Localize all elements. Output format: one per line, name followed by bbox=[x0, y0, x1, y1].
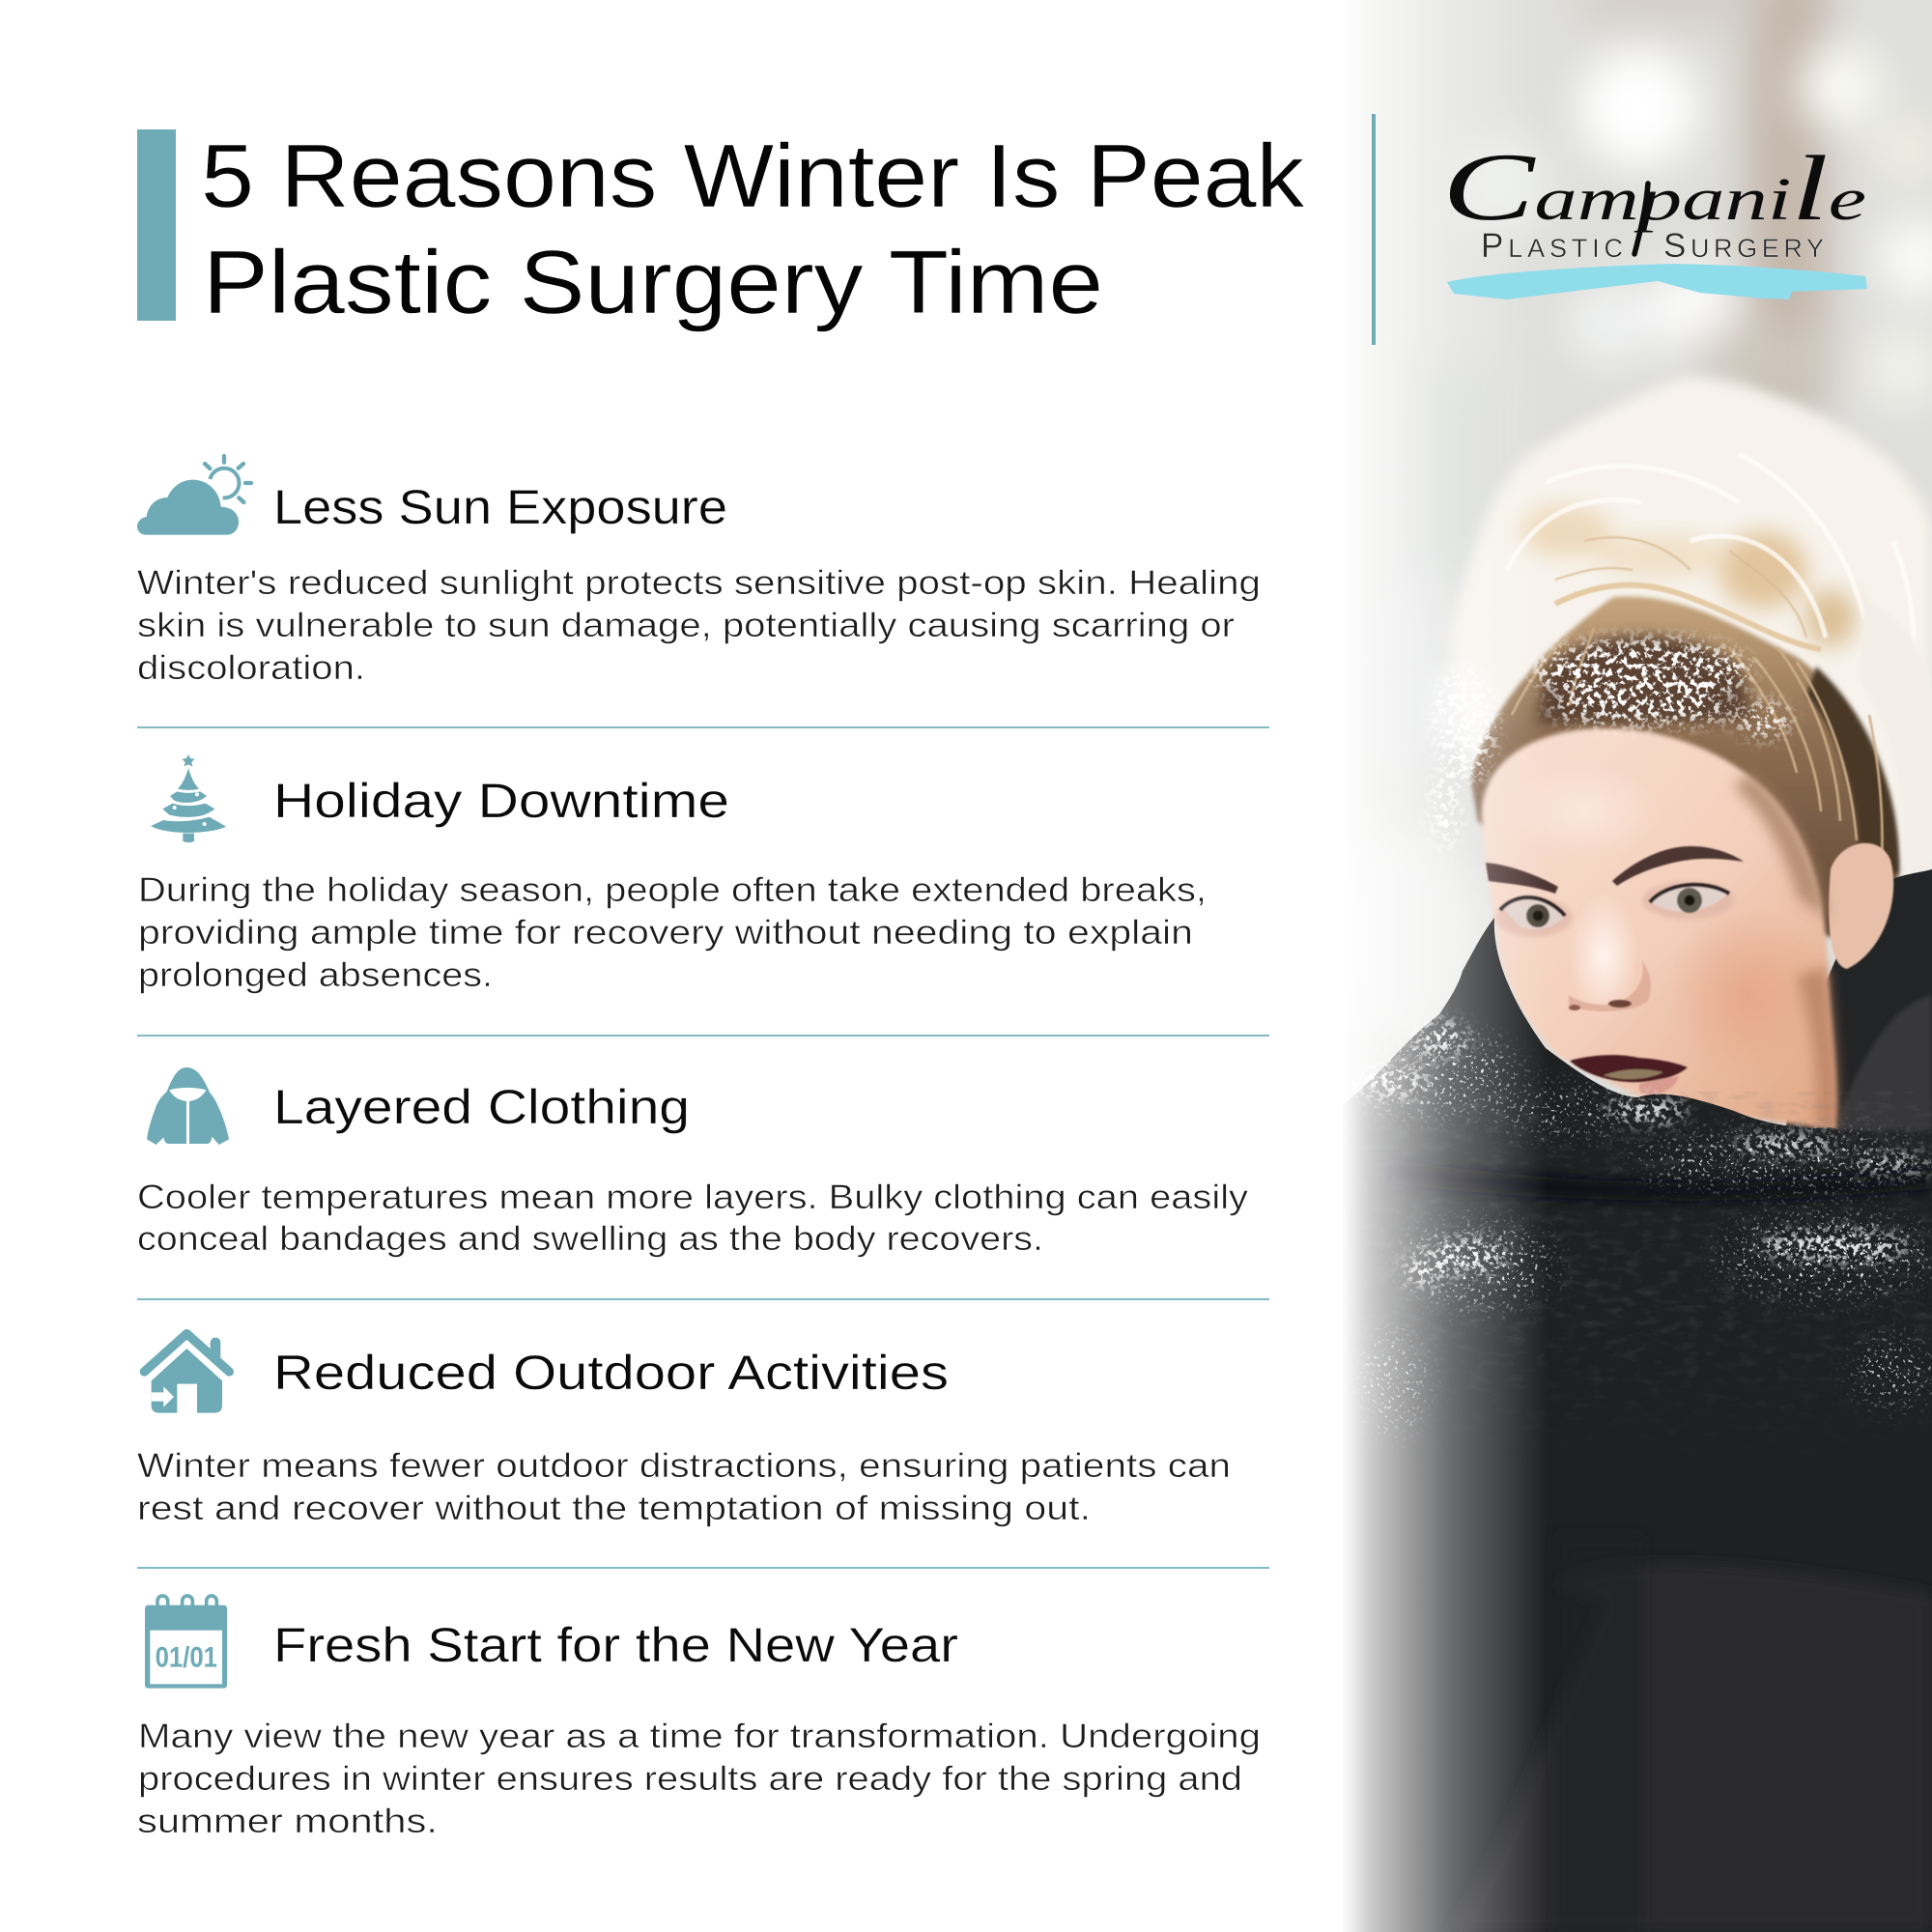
icon: hooded jacket bbox=[147, 1067, 229, 1145]
item 4: Reduced Outdoor Activities bbox=[137, 1334, 1231, 1527]
body text: conceal bandages and swelling as the body recovers. bbox=[137, 1220, 1043, 1258]
body text bbox=[137, 1447, 1231, 1527]
hair bun bbox=[1449, 377, 1932, 869]
body text bbox=[138, 871, 1207, 994]
body text: Winter's reduced sunlight protects sensitive post-op skin. Healing bbox=[137, 564, 1261, 602]
body text: rest and recover without the temptation of missing out. bbox=[137, 1490, 1091, 1527]
heading: Fresh Start for the New Year bbox=[273, 1618, 958, 1672]
logo brush stroke bbox=[1447, 264, 1867, 299]
header divider bbox=[1372, 114, 1376, 345]
title bbox=[201, 126, 1305, 332]
body text bbox=[137, 1179, 1249, 1258]
item 5: Fresh Start for the New Year bbox=[137, 1596, 1261, 1840]
body text: Winter means fewer outdoor distractions, ensuring patients can bbox=[137, 1447, 1231, 1485]
body text: Cooler temperatures mean more layers. Bulky clothing can easily bbox=[137, 1179, 1249, 1216]
item 3: Layered Clothing bbox=[137, 1067, 1249, 1258]
body text: Many view the new year as a time for transformation. Undergoing bbox=[138, 1718, 1261, 1755]
jaw and neck shadow bbox=[1797, 966, 1837, 1130]
photo background bokeh bbox=[1369, 0, 1932, 1125]
eye right bbox=[1650, 885, 1729, 913]
logo subtitle: PLASTIC bbox=[1481, 227, 1623, 265]
heading: Reduced Outdoor Activities bbox=[273, 1346, 949, 1400]
logo subtitle: SURGERY bbox=[1663, 227, 1824, 265]
logo descender flourish bbox=[1634, 184, 1648, 254]
title: 5 Reasons Winter Is Peak bbox=[201, 126, 1305, 226]
nose bbox=[1569, 961, 1651, 1011]
body text bbox=[137, 1718, 1261, 1840]
face bbox=[1482, 728, 1893, 1130]
icon: christmas tree bbox=[151, 754, 226, 842]
icon: calendar: 01/01 bbox=[156, 1641, 217, 1673]
dark inner jacket right bbox=[1777, 869, 1932, 1159]
fade to white bbox=[1333, 0, 1548, 1932]
body text: skin is vulnerable to sun damage, potentially causing scarring or bbox=[137, 607, 1235, 644]
hairline shadow bbox=[1734, 773, 1828, 918]
body text: procedures in winter ensures results are ready for the spring and bbox=[138, 1760, 1242, 1798]
body text: During the holiday season, people often take extended breaks, bbox=[138, 871, 1207, 909]
heading: Layered Clothing bbox=[273, 1080, 690, 1134]
icon: house with arrow bbox=[144, 1334, 229, 1413]
body text: summer months. bbox=[137, 1803, 438, 1840]
heading: Less Sun Exposure bbox=[273, 480, 727, 534]
item 1: Less Sun Exposure bbox=[137, 456, 1261, 687]
icon: calendar bbox=[145, 1596, 227, 1689]
brown front hair bbox=[1471, 596, 1899, 937]
eyebrow left bbox=[1486, 863, 1558, 894]
body text: prolonged absences. bbox=[138, 956, 493, 994]
logo script wordmark: C ampani le bbox=[1442, 133, 1866, 241]
logo subtitle bbox=[1481, 227, 1824, 265]
eyebrow right bbox=[1612, 846, 1744, 886]
body text: providing ample time for recovery without needing to explain bbox=[138, 914, 1193, 952]
eye socket shadows bbox=[1495, 881, 1735, 937]
icon: cloud and sun bbox=[137, 456, 251, 535]
body text: discoloration. bbox=[137, 649, 365, 687]
scarf and jacket bbox=[1333, 918, 1932, 1932]
photo: woman in snow bbox=[1314, 0, 1932, 1932]
body text bbox=[137, 564, 1261, 687]
title accent bar bbox=[137, 129, 176, 321]
logo: Campanile Plastic Surgery bbox=[1442, 133, 1867, 299]
eye left bbox=[1500, 897, 1565, 929]
lips bbox=[1570, 1055, 1688, 1095]
ear bbox=[1829, 843, 1893, 969]
heading: Holiday Downtime bbox=[273, 774, 729, 828]
white hair right of face bbox=[1864, 620, 1932, 877]
title: Plastic Surgery Time bbox=[203, 232, 1103, 332]
snow on hair bbox=[1429, 639, 1790, 850]
snow on scarf bbox=[1343, 1021, 1932, 1430]
item 2: Holiday Downtime bbox=[138, 754, 1207, 994]
